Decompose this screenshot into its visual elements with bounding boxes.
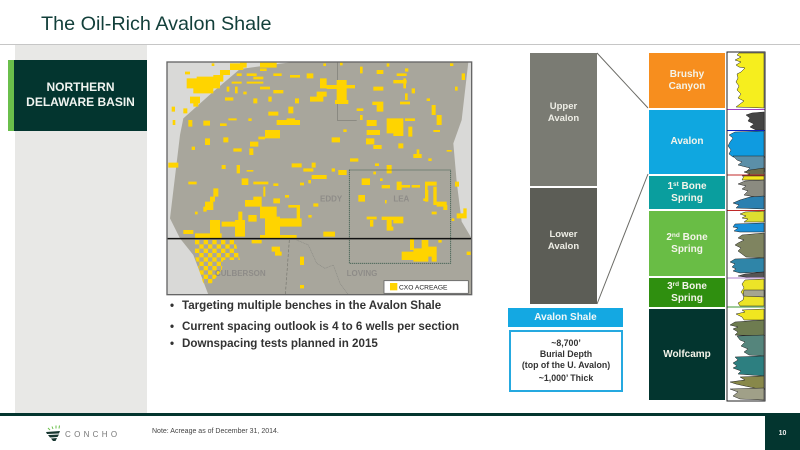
stratigraphic column: 2nd bone spring — [649, 211, 725, 276]
county labels: EDDY — [320, 195, 343, 204]
avalon shale facts box: (top of the U. Avalon) — [522, 360, 610, 370]
bullet list: • — [170, 337, 174, 350]
avalon shale facts box: ~1,000’ Thick — [539, 373, 593, 383]
page number — [765, 416, 800, 450]
concho logo — [46, 425, 120, 441]
connector lines — [597, 52, 648, 304]
well log chart — [726, 52, 766, 402]
stratigraphic column: brushy canyon: Canyon — [669, 80, 705, 92]
title: The Oil-Rich Avalon Shale — [41, 13, 272, 35]
concho logo: CONCHO — [65, 430, 120, 439]
avalon shale facts box: ~8,700’ — [551, 338, 581, 348]
left sidebar panel — [15, 45, 147, 413]
avalon shale header — [508, 308, 623, 327]
stratigraphic column: 3rd bone spring: 3rd Bone — [667, 280, 707, 292]
stratigraphic column: 3rd bone spring — [649, 278, 725, 307]
panel: northern delaware basin heading — [8, 60, 147, 131]
county labels — [215, 195, 410, 278]
legend: cxo acreage: CXO ACREAGE — [399, 285, 448, 292]
panel: northern delaware basin heading: DELAWARE BASIN — [26, 94, 135, 108]
stratigraphic column: wolfcamp: Wolfcamp — [663, 348, 711, 360]
stratigraphic column: avalon — [649, 110, 725, 174]
bullet list: Targeting multiple benches in the Avalon Shale — [182, 299, 441, 312]
lower avalon block: Avalon — [548, 241, 579, 252]
stratigraphic column: 2nd bone spring: Spring — [671, 244, 703, 254]
stratigraphic column: avalon: Avalon — [671, 136, 703, 147]
bullet list: • — [170, 299, 174, 312]
stratigraphic column: 2nd bone spring: 2nd Bone — [666, 232, 708, 242]
bullet list — [170, 299, 459, 350]
county labels: CULBERSON — [215, 269, 266, 278]
stratigraphic column: brushy canyon — [649, 53, 725, 108]
stratigraphic column: brushy canyon: Brushy — [670, 68, 704, 80]
stratigraphic column: wolfcamp — [649, 309, 725, 400]
stratigraphic column: 1st bone spring: Spring — [671, 192, 703, 204]
bullet list: Current spacing outlook is 4 to 6 wells per section — [182, 320, 459, 333]
county labels: LOVING — [347, 269, 377, 278]
icon: concho fan mark — [46, 425, 60, 441]
yellow acreage blocks — [168, 63, 471, 288]
avalon shale facts box: Burial Depth — [540, 349, 592, 359]
panel: northern delaware basin heading: NORTHERN — [46, 80, 114, 94]
avalon shale header: Avalon Shale — [534, 312, 597, 323]
stratigraphic column: 1st bone spring — [649, 176, 725, 209]
bullet list: • — [170, 320, 174, 333]
stratigraphic column: 3rd bone spring: Spring — [671, 292, 703, 304]
page number: 10 — [779, 430, 786, 436]
avalon shale facts box — [509, 330, 623, 392]
footnote: Note: Acreage as of December 31, 2014. — [152, 428, 279, 435]
stratigraphic column: 1st bone spring: 1st Bone — [667, 180, 707, 192]
upper avalon block: Avalon — [548, 113, 579, 124]
legend: cxo acreage — [384, 281, 468, 293]
footer bar — [0, 413, 800, 416]
county labels: LEA — [393, 195, 410, 204]
upper avalon block: Upper — [550, 101, 577, 112]
bullet list: Downspacing tests planned in 2015 — [182, 337, 378, 350]
lower avalon block: Lower — [550, 229, 577, 240]
map of acreage — [166, 61, 472, 296]
lower avalon block — [530, 188, 597, 304]
upper avalon block — [530, 53, 597, 186]
